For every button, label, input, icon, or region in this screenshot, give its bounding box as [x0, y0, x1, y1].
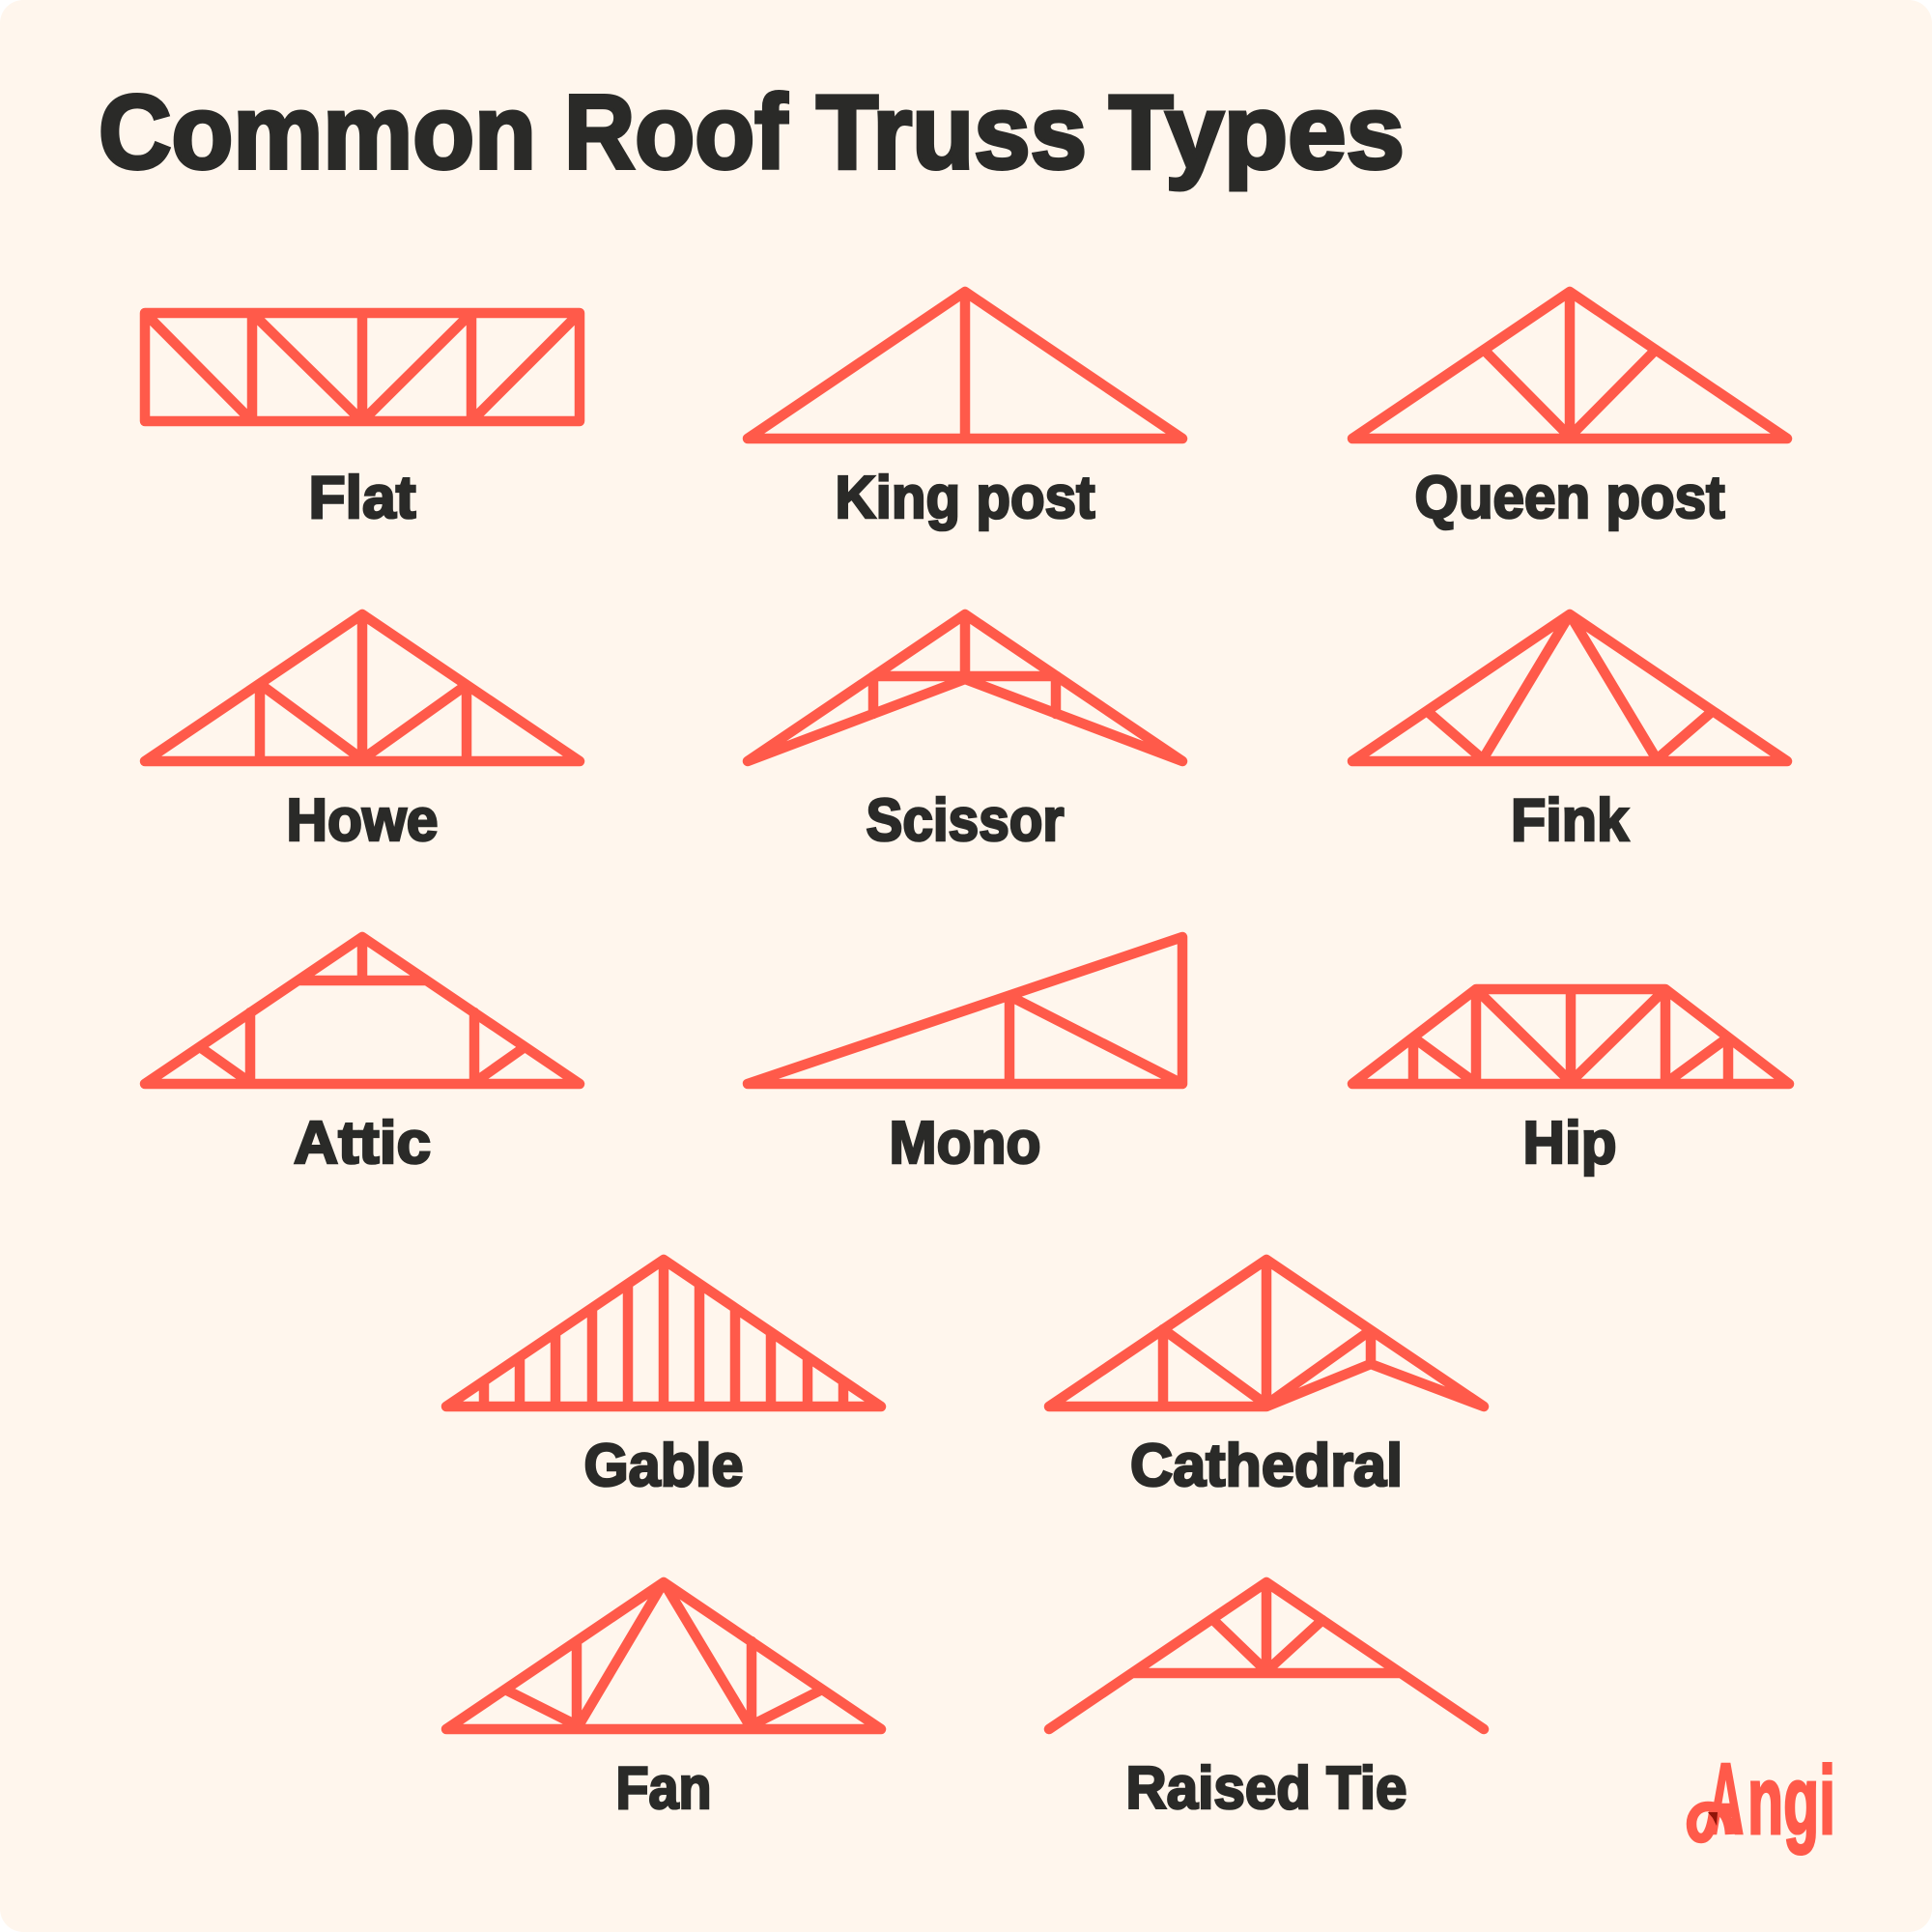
logo wordmark: A	[1708, 1744, 1744, 1856]
logo overlap shadow	[1708, 1812, 1718, 1826]
label: Howe: Howe	[286, 787, 439, 854]
truss diagram: Hip	[1352, 989, 1789, 1084]
truss diagram: Howe	[145, 614, 580, 761]
label: Gable: Gable	[583, 1433, 744, 1499]
title: Truss	[816, 73, 1087, 191]
panel: Scissor truss	[748, 614, 1182, 854]
logo wordmark: ngi	[1747, 1747, 1835, 1855]
panel: King post truss	[748, 292, 1182, 531]
panel: Attic truss	[145, 937, 580, 1177]
panel: Raised Tie truss	[1049, 1582, 1484, 1822]
truss diagram: Fink	[1352, 614, 1787, 761]
label: Raised Tie: Raised Tie	[1126, 1755, 1406, 1822]
panel: Howe truss	[145, 614, 580, 854]
truss diagram: Gable	[446, 1260, 881, 1406]
title: Common	[99, 73, 536, 191]
label: Mono: Mono	[889, 1110, 1041, 1177]
truss diagram: Mono	[748, 937, 1182, 1084]
panel: Queen post truss	[1352, 292, 1787, 531]
label: King post: King post	[835, 465, 1095, 531]
logo swash loop	[1691, 1804, 1730, 1838]
panel: Flat truss	[145, 313, 580, 531]
truss diagram: Attic	[145, 937, 580, 1084]
label: Attic: Attic	[294, 1110, 431, 1177]
truss diagram: Raised Tie	[1049, 1582, 1484, 1729]
title	[99, 73, 1405, 191]
panel: Mono truss	[748, 937, 1182, 1177]
truss diagram: Cathedral	[1049, 1260, 1484, 1406]
truss diagram: Fan	[446, 1582, 881, 1729]
panel: Cathedral truss	[1049, 1260, 1484, 1499]
panel: Fan truss	[446, 1582, 881, 1822]
label: Cathedral: Cathedral	[1130, 1433, 1403, 1499]
panel: Hip truss	[1352, 989, 1789, 1177]
panel: Fink truss	[1352, 614, 1787, 854]
truss diagram: King post	[748, 292, 1182, 439]
title: Roof	[564, 73, 788, 191]
truss diagram: Queen post	[1352, 292, 1787, 439]
truss diagram: Flat	[145, 313, 580, 421]
label: Fink: Fink	[1511, 787, 1629, 854]
label: Scissor: Scissor	[866, 787, 1065, 854]
title: Types	[1109, 73, 1405, 191]
label: Queen post: Queen post	[1414, 465, 1725, 531]
truss diagram: Scissor	[748, 614, 1182, 761]
label: Fan: Fan	[616, 1755, 711, 1822]
label: Flat: Flat	[309, 465, 415, 531]
logo: Angi	[1691, 1744, 1835, 1856]
panel: Gable truss	[446, 1260, 881, 1499]
label: Hip: Hip	[1522, 1110, 1617, 1177]
